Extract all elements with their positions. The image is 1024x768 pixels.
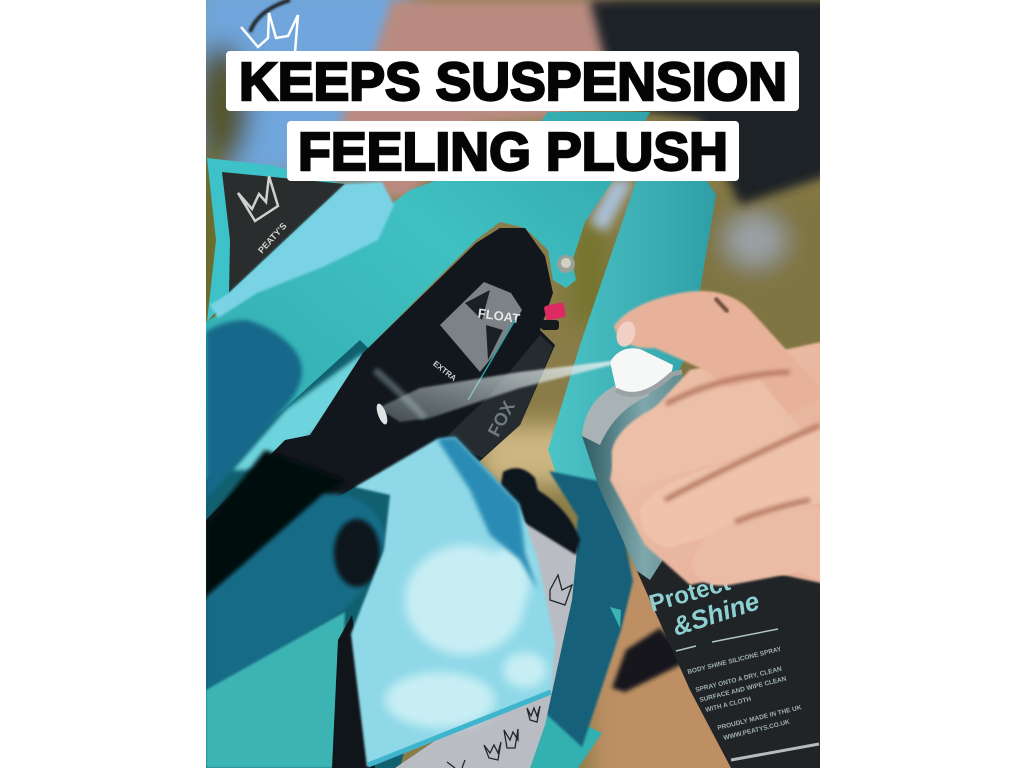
pink rebound knob [541,302,566,330]
bottle cap [500,468,580,555]
can fine print: SURFACE AND WIPE CLEAN [699,675,787,704]
lower shock shaft [206,450,345,595]
crown logo outline [241,13,298,52]
can fine print: WITH A CLOTH [705,696,752,714]
finger creases [665,372,820,522]
towel label text: PEATY'S [256,221,289,255]
lower towel [351,437,555,767]
can label text: Protect [646,569,733,618]
dark teal down tube [543,471,633,747]
rear shock [206,228,555,600]
lower dark link [206,494,386,700]
can fine print: WWW.PEATYS.CO.UK [723,719,791,742]
towel light mottling [385,545,547,728]
towel teal hem [207,158,345,322]
blurred strap [250,0,290,32]
can fine print: PROUDLY MADE IN THE UK [717,704,803,732]
towel crown logo [238,176,278,221]
fox label: FOX [484,398,519,440]
towel dark label [222,172,345,293]
can bottom rim [731,744,819,760]
towel hem [368,692,551,765]
frame notch [610,607,621,628]
can label text [646,569,763,642]
rider's dark shorts [590,0,830,205]
can rim [616,372,682,394]
shock body and reservoir [206,228,555,600]
ring finger [640,430,830,548]
title line 2: FEELING PLUSH [298,122,728,182]
index finger [614,291,830,420]
bottle crowns [447,575,572,768]
can divider [676,629,778,651]
lower teal frame [206,612,345,768]
bolt on frame [557,255,575,273]
water bottle [395,468,580,768]
palm and thumb base [610,340,830,585]
spray can [582,348,830,768]
hand [610,291,830,586]
can fine print: SPRAY ONTO A DRY, CLEAN [695,666,783,694]
infographic scene [206,0,820,768]
shock band text: EXTRA [431,359,458,383]
dark gap below link [332,615,375,768]
reservoir grey tone [445,335,553,458]
upper towel [207,158,394,322]
middle finger [612,380,810,490]
fingernail [613,319,639,349]
can fine print: BODY SHINE SILICONE SPRAY [687,646,783,676]
photo background [190,0,840,768]
main teal frame arm [206,112,650,500]
towel shadow fold [437,437,538,590]
can teal shoulder [582,370,720,580]
sky gap beside frame [590,180,634,232]
float decal [440,282,522,372]
rider's pink shirt [340,0,620,198]
float decal: FLOAT [477,305,521,326]
can nozzle [610,348,673,394]
title line 1: KEEPS SUSPENSION [239,52,787,112]
base under lower frame and towel [206,340,480,768]
can fine print [687,646,803,742]
lower strut segment [530,714,602,768]
dark strap behind can [612,628,690,692]
right frame strut [548,170,716,490]
can dome [582,380,650,445]
pivot hole [334,519,380,587]
spray mist [378,361,611,422]
can black body [637,470,830,768]
dark teal frame panel [206,320,302,500]
dirt on knuckle [715,298,728,312]
light stripe along frame [232,353,372,470]
can label text: &Shine [669,585,763,642]
bottle body [395,520,578,768]
little finger [692,505,830,586]
fluffy towel edge [210,182,394,318]
shock highlights [375,370,425,418]
residue on shock [374,402,390,426]
